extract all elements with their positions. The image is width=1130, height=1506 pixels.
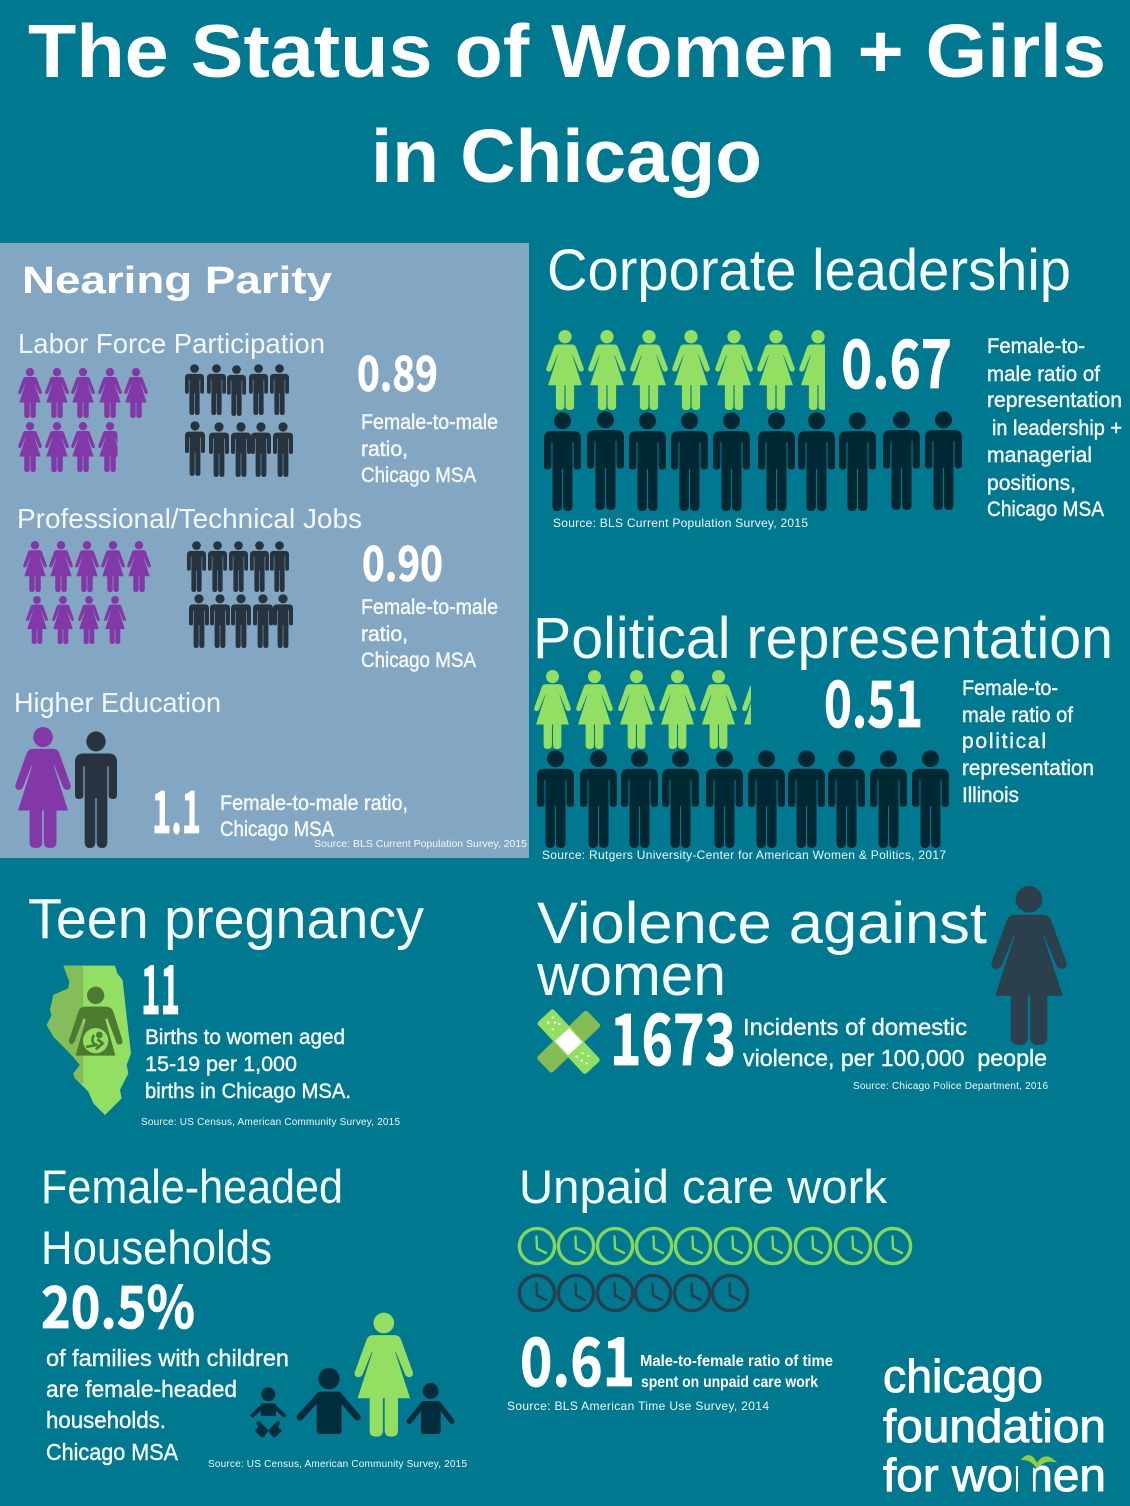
panel: violence against women: women xyxy=(536,943,726,1008)
panel: corporate leadership: Corporate leadership xyxy=(547,238,1071,303)
section: professional technical jobs: Chicago MSA xyxy=(361,649,476,672)
panel: female-headed households: Female-headed xyxy=(41,1160,343,1213)
men pictogram xyxy=(544,411,962,511)
section: higher education: Higher Education xyxy=(14,687,221,718)
panel: political representation xyxy=(533,606,1113,862)
panel: unpaid care work: Unpaid care work xyxy=(519,1160,888,1213)
panel: political representation: representation xyxy=(962,757,1094,780)
section: labor force participation: Chicago MSA xyxy=(361,464,476,487)
section: higher education: Chicago MSA xyxy=(220,818,334,841)
section: higher education: Source: BLS Current Population Survey, 2015 xyxy=(314,838,527,850)
panel: unpaid care work: spent on unpaid care work xyxy=(641,1374,818,1391)
panel: violence against women: Source: Chicago Police Department, 2016 xyxy=(853,1081,1048,1092)
panel: corporate leadership: Female-to- xyxy=(987,335,1085,358)
panel: political representation: male ratio of xyxy=(962,704,1073,727)
section: labor force participation xyxy=(18,328,498,487)
clocks: men xyxy=(519,1275,748,1311)
panel: nearing parity xyxy=(0,243,529,858)
panel: female-headed households: are female-headed xyxy=(46,1376,237,1402)
panel: political representation: Source: Rutgers University-Center for American Women & Politics, 2017 xyxy=(542,848,946,862)
icon: family xyxy=(253,1313,452,1437)
panel: teen pregnancy: Births to women aged xyxy=(145,1026,345,1049)
panel: unpaid care work: Source: BLS American Time Use Survey, 2014 xyxy=(507,1399,769,1413)
logo: chicago foundation for women: chicago xyxy=(883,1350,1043,1402)
panel: political representation: Female-to- xyxy=(962,677,1058,700)
panel: corporate leadership: representation xyxy=(987,389,1122,412)
panel: corporate leadership: 0.67 xyxy=(841,311,952,408)
panel: corporate leadership xyxy=(544,238,1122,530)
panel: violence against women xyxy=(536,886,1067,1092)
section: professional technical jobs: ratio, xyxy=(361,623,408,646)
title xyxy=(28,9,1106,198)
panel: political representation: political xyxy=(962,730,1046,753)
panel: unpaid care work xyxy=(507,1160,911,1413)
panel: corporate leadership: Chicago MSA xyxy=(987,498,1104,521)
panel: violence against women: Violence against xyxy=(537,891,987,956)
section: professional technical jobs: Professional/Technical Jobs xyxy=(17,503,362,534)
panel: corporate leadership: Source: BLS Current Population Survey, 2015 xyxy=(553,516,808,530)
section: labor force participation: Labor Force Participation xyxy=(18,328,325,359)
panel: female-headed households: 20.5% xyxy=(41,1261,195,1345)
panel: female-headed households: Chicago MSA xyxy=(46,1439,179,1465)
men pictogram xyxy=(537,750,949,848)
panel: corporate leadership: male ratio of xyxy=(987,363,1100,386)
section: labor force participation: Female-to-male xyxy=(361,411,498,434)
title: in Chicago xyxy=(371,114,762,198)
panel: corporate leadership: positions, xyxy=(987,472,1076,495)
section: labor force participation: 0.89 xyxy=(357,335,438,405)
panel: political representation: Political representation xyxy=(533,606,1113,671)
logo: chicago foundation for women xyxy=(883,1350,1106,1501)
icon: woman xyxy=(991,886,1067,1045)
clocks: women xyxy=(519,1228,911,1264)
section: professional technical jobs xyxy=(17,503,498,672)
panel: female-headed households: Source: US Census, American Community Survey, 2015 xyxy=(208,1459,467,1470)
panel: teen pregnancy: Teen pregnancy xyxy=(28,887,424,951)
panel: female-headed households xyxy=(41,1160,467,1470)
panel: violence against women: violence, per 100,000 people xyxy=(743,1045,1047,1071)
section: labor force participation: ratio, xyxy=(361,438,408,461)
panel: unpaid care work: 0.61 xyxy=(520,1309,635,1406)
panel: political representation: Illinois xyxy=(962,784,1019,807)
section: higher education: Female-to-male ratio, xyxy=(220,792,408,815)
women pictogram xyxy=(534,670,751,749)
panel: violence against women: 1673 xyxy=(610,984,736,1086)
women pictogram xyxy=(546,330,837,410)
panel: unpaid care work: Male-to-female ratio of time xyxy=(640,1353,833,1370)
panel: teen pregnancy: Source: US Census, American Community Survey, 2015 xyxy=(141,1117,400,1128)
panel: corporate leadership: in leadership + xyxy=(992,417,1122,440)
logo: chicago foundation for women: foundation xyxy=(883,1400,1106,1452)
panel: political representation: 0.51 xyxy=(824,654,923,746)
panel: teen pregnancy: 11 xyxy=(141,937,180,1034)
title: The Status of Women + Girls xyxy=(28,9,1106,93)
section: higher education xyxy=(14,687,527,850)
icon: illinois map with pregnant woman xyxy=(43,963,131,1115)
panel: corporate leadership: managerial xyxy=(987,444,1092,467)
section: professional technical jobs: Female-to-male xyxy=(361,596,498,619)
panel: violence against women: Incidents of domestic xyxy=(743,1014,967,1040)
panel: female-headed households: of families with children xyxy=(46,1345,289,1371)
logo: chicago foundation for women: for women xyxy=(883,1449,1106,1501)
section: higher education: 1.1 xyxy=(152,766,201,850)
panel: female-headed households: households. xyxy=(46,1407,166,1433)
heading: nearing parity: Nearing Parity xyxy=(22,260,332,302)
panel: teen pregnancy xyxy=(28,887,424,1128)
panel: female-headed households: Households xyxy=(41,1221,272,1274)
panel: teen pregnancy: births in Chicago MSA. xyxy=(145,1080,351,1103)
panel: teen pregnancy: 15-19 per 1,000 xyxy=(145,1053,297,1076)
section: professional technical jobs: 0.90 xyxy=(362,525,443,595)
icon: bandage xyxy=(536,1008,601,1075)
